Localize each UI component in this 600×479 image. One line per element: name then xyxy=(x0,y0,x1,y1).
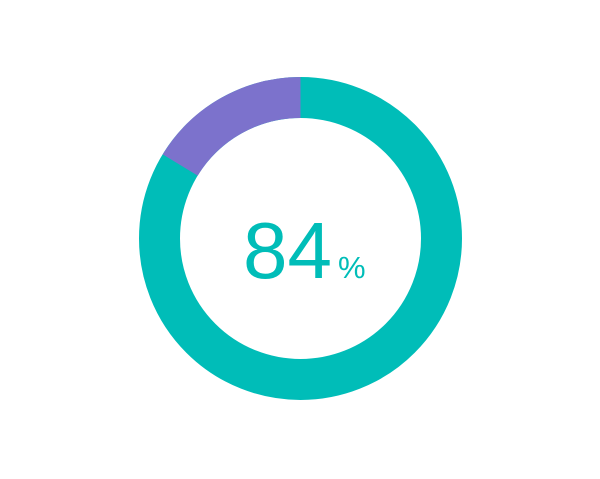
ring: purple 16% segment xyxy=(180,98,300,165)
ring: teal 84% segment xyxy=(160,98,442,380)
center value label: % xyxy=(338,250,366,285)
center value label: 84 xyxy=(243,206,332,295)
